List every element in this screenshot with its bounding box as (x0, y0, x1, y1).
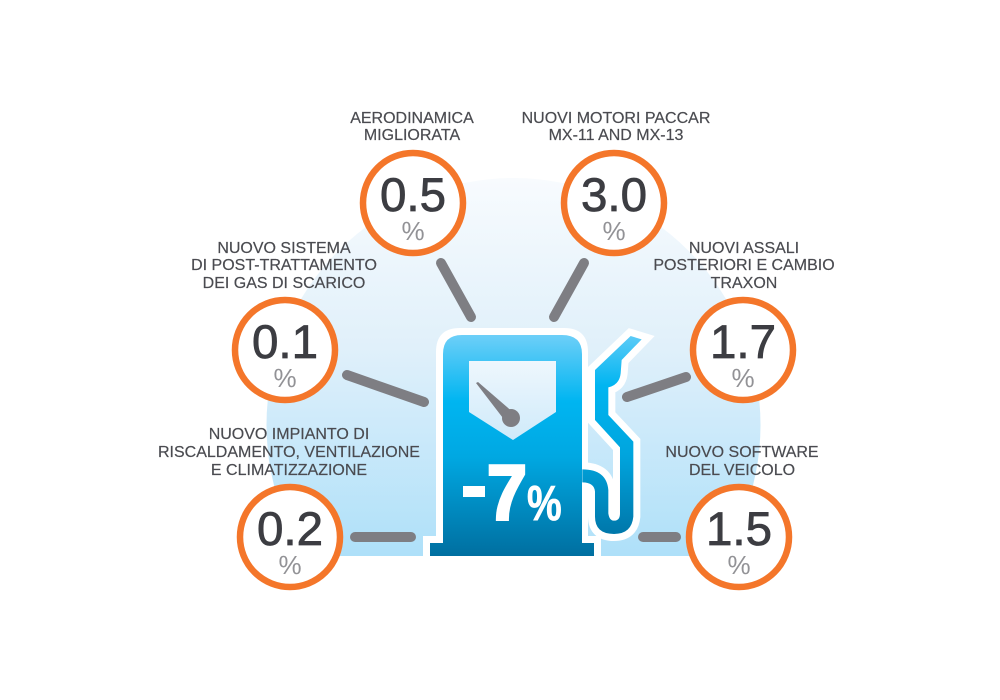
metric: 0.1 percent: 0.1 (252, 316, 318, 369)
background dome (266, 186, 760, 556)
nozzle and hose (582, 336, 642, 534)
metric: 0.1 percent: % (273, 363, 297, 393)
label: nuovo sistema di post-trattamento: DEI GAS DI SCARICO (203, 275, 365, 292)
label: nuovi assali posteriori e cambio traxon: NUOVI ASSALI (689, 240, 799, 257)
label: nuovi assali posteriori e cambio traxon: TRAXON (711, 275, 777, 292)
metric: 0.5 percent: 0.5 (380, 169, 446, 222)
minus seven percent: 7 (487, 449, 527, 536)
metric: 0.1 percent (235, 300, 335, 400)
label: aerodinamica migliorata: MIGLIORATA (364, 127, 460, 144)
metric: 0.2 percent: 0.2 (257, 503, 323, 556)
metric: 3.0 percent (564, 153, 664, 253)
label: nuovo sistema di post-trattamento: DI POST-TRATTAMENTO (191, 257, 377, 274)
gauge screen (469, 361, 556, 440)
metric: 1.5 percent: 1.5 (706, 503, 772, 556)
minus seven percent: % (527, 477, 562, 531)
pump white outline (423, 328, 601, 556)
metric: 1.5 percent (689, 487, 789, 587)
connector lines (347, 263, 686, 537)
metric: 0.5 percent (363, 153, 463, 253)
minus seven percent (463, 449, 562, 536)
fuel pump icon (423, 328, 642, 556)
metric: 1.5 percent: % (727, 550, 751, 580)
label: nuovo software del veicolo: NUOVO SOFTWARE (665, 444, 819, 461)
label: nuovo impianto di riscaldamento: E CLIMATIZZAZIONE (211, 462, 367, 479)
label: nuovo impianto di riscaldamento: NUOVO IMPIANTO DI (209, 426, 369, 443)
label: nuovi assali posteriori e cambio traxon: POSTERIORI E CAMBIO (653, 257, 835, 274)
metric: 1.7 percent: % (731, 363, 755, 393)
label: nuovo software del veicolo: DEL VEICOLO (689, 462, 795, 479)
pump body (430, 335, 594, 556)
label: aerodinamica migliorata: AERODINAMICA (350, 110, 474, 127)
label: nuovo impianto di riscaldamento: RISCALDAMENTO, VENTILAZIONE (158, 444, 420, 461)
label: nuovo sistema di post-trattamento: NUOVO SISTEMA (217, 240, 351, 257)
metric: 0.2 percent: % (278, 550, 302, 580)
metric: 1.7 percent: 1.7 (710, 316, 776, 369)
label: nuovi motori paccar: MX-11 AND MX-13 (549, 127, 684, 144)
metric: 3.0 percent: 3.0 (581, 169, 647, 222)
metric: 0.5 percent: % (401, 216, 425, 246)
label: nuovi motori paccar: NUOVI MOTORI PACCAR (522, 110, 710, 127)
metric: 3.0 percent: % (602, 216, 626, 246)
gauge needle (476, 382, 520, 427)
metric: 1.7 percent (693, 300, 793, 400)
metric: 0.2 percent (240, 487, 340, 587)
